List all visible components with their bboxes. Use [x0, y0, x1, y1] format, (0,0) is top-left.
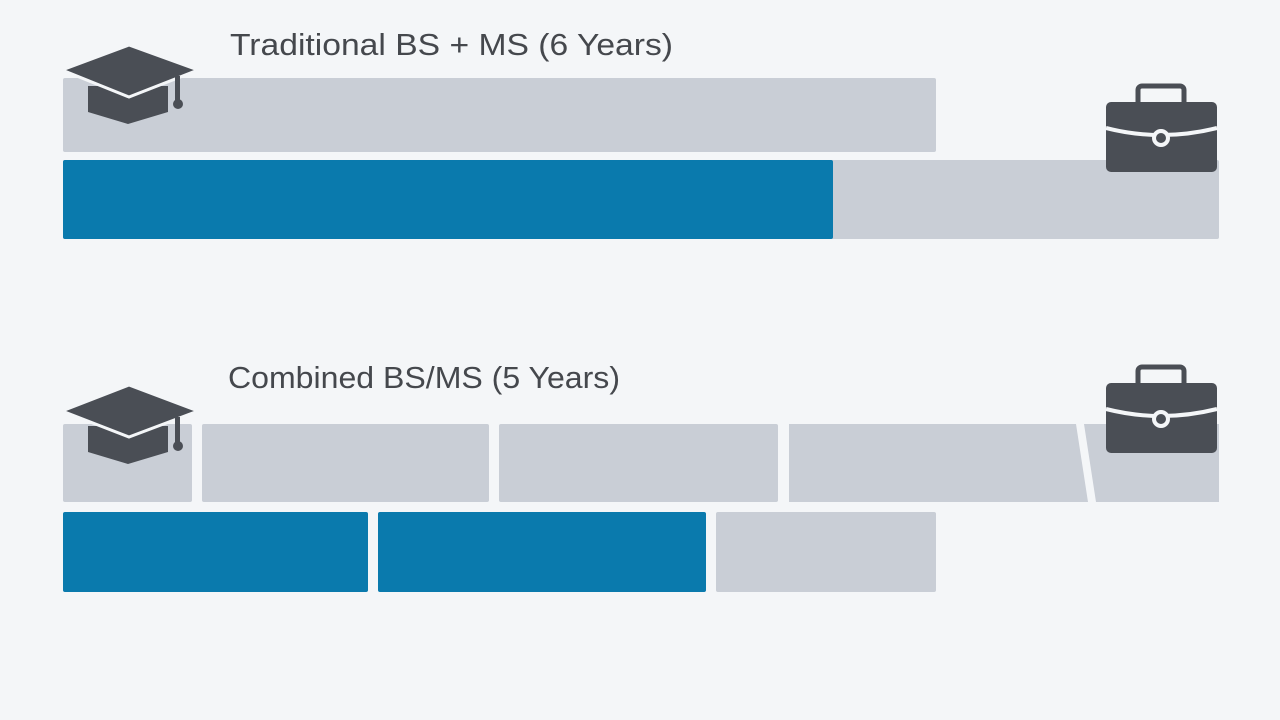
- icon: briefcase top: [1106, 86, 1217, 172]
- combined timeline bars: [63, 424, 1219, 592]
- icon: graduation cap bottom: [62, 385, 198, 464]
- icon: graduation cap top: [62, 45, 198, 124]
- title: combined: Combined BS/MS (5 Years): [228, 360, 620, 395]
- title: traditional: Traditional BS + MS (6 Years): [230, 27, 673, 62]
- traditional timeline bars: [63, 78, 1219, 239]
- icon: briefcase bottom: [1106, 367, 1217, 453]
